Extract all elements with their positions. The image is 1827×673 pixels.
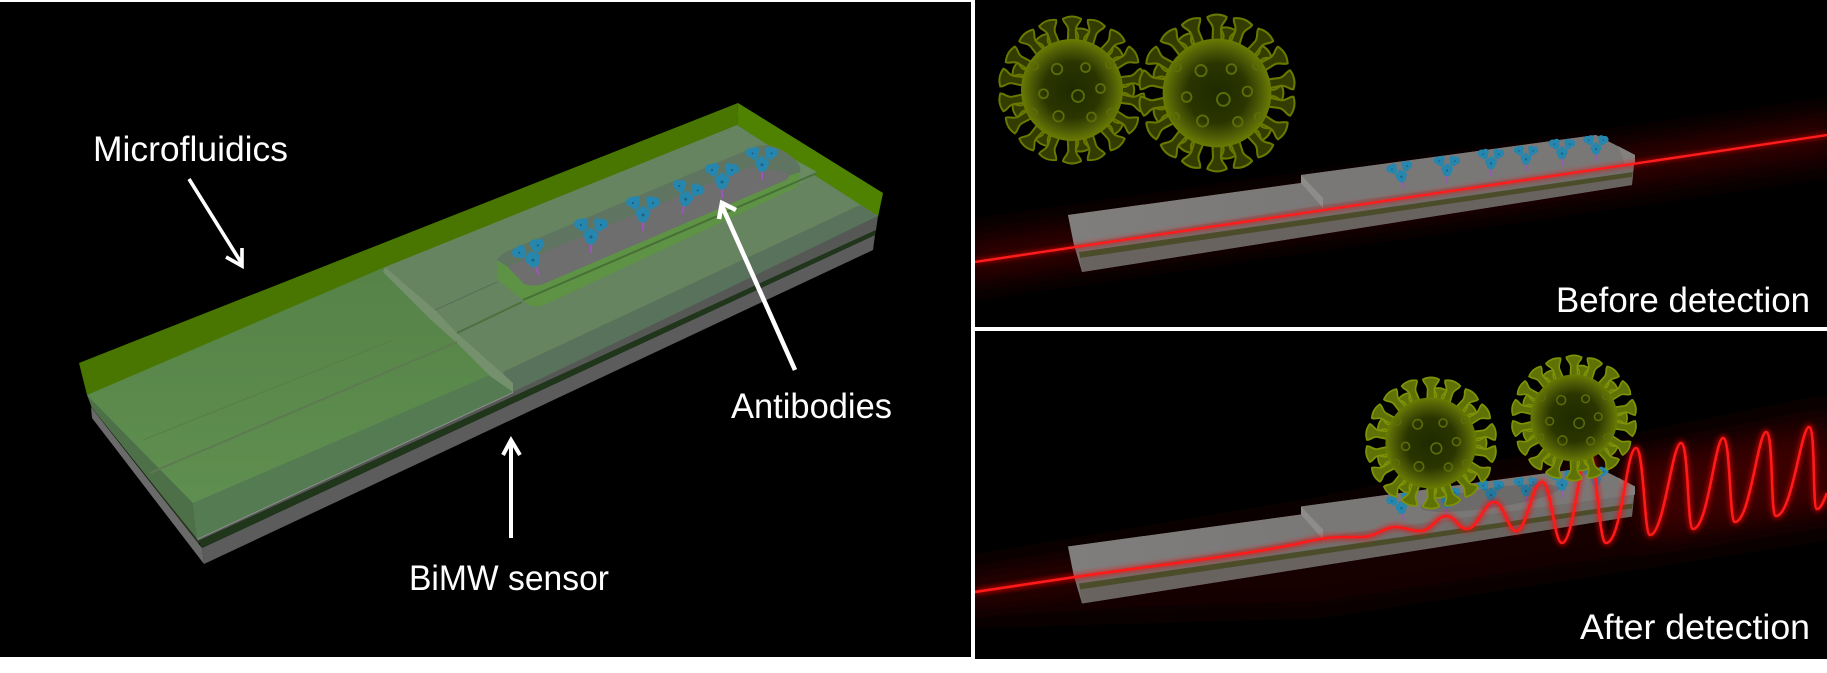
sensor chip with antibodies: [1068, 135, 1635, 272]
label: Before detection: Before detection: [1556, 281, 1810, 320]
panel: before detection: [960, 0, 1827, 327]
microfluidic channel: [497, 145, 817, 307]
microfluidics green box: [79, 103, 883, 539]
sensor chip with antibodies: [1068, 466, 1635, 604]
arrow: microfluidics: [189, 179, 242, 266]
BiMW sensor base layers: [91, 216, 878, 564]
laser interference wave: [975, 427, 1827, 592]
virus left bound: [1365, 377, 1497, 509]
virus right bound: [1511, 355, 1637, 481]
label: After detection: After detection: [1580, 608, 1810, 647]
label: Antibodies: Antibodies: [731, 387, 892, 426]
panel: after detection: [960, 331, 1827, 659]
virus right: [1138, 15, 1296, 171]
label: BiMW sensor: BiMW sensor: [409, 559, 609, 598]
antibodies on channel floor: [510, 147, 778, 281]
laser glow: [960, 400, 1827, 620]
arrow: antibodies: [719, 203, 795, 370]
laser beam: [975, 135, 1827, 262]
panel: device overview: [0, 2, 971, 657]
virus shadow on chip: [1421, 484, 1560, 512]
laser glow: [960, 108, 1827, 290]
virus left: [998, 16, 1146, 164]
arrow: BiMW sensor: [503, 440, 520, 538]
label: Microfluidics: Microfluidics: [93, 130, 288, 169]
